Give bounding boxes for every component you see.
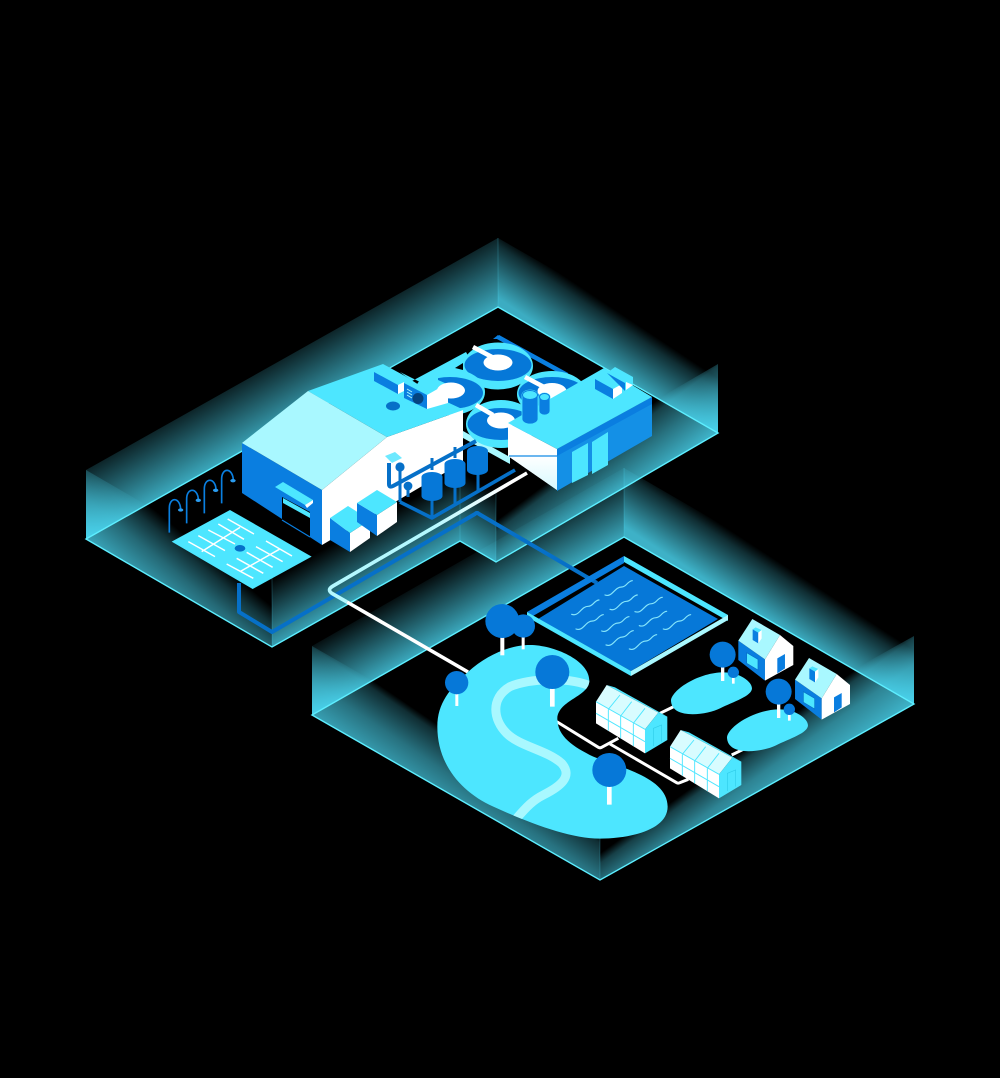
crate: right — [357, 490, 397, 536]
control building — [508, 367, 652, 491]
trees around pond — [445, 604, 626, 805]
doors — [572, 432, 608, 483]
main building — [242, 364, 463, 552]
house: lower — [795, 658, 850, 720]
greenhouse: upper — [596, 685, 667, 753]
clarifier platform — [400, 335, 567, 464]
valve box — [385, 452, 402, 463]
white pipe: plant to pond — [330, 473, 527, 672]
reservoir — [527, 556, 728, 676]
stream — [496, 680, 592, 818]
lower glass box walls — [312, 468, 914, 880]
greenhouse: lower — [670, 730, 741, 798]
crate: left — [330, 506, 370, 552]
fan unit — [404, 383, 448, 409]
clarifier tank: left — [415, 369, 485, 415]
house: upper — [738, 619, 793, 681]
building door and awning — [275, 482, 313, 537]
reservoir waves — [572, 581, 691, 649]
lamp posts — [169, 470, 236, 533]
rooftop units — [595, 367, 633, 399]
park pond with stream — [437, 645, 668, 839]
garden: lower — [727, 679, 808, 751]
gap between clarifiers — [455, 363, 463, 370]
roof vent — [386, 402, 400, 410]
storage tanks — [422, 446, 488, 501]
upper glass box walls — [86, 238, 718, 647]
silo: large — [522, 390, 538, 424]
garden: upper — [671, 642, 752, 714]
roof equipment box — [374, 372, 404, 394]
clarifier tank: bottom — [466, 400, 536, 448]
silo: small — [539, 393, 550, 415]
swimming pool — [172, 510, 312, 589]
isometric water cycle illustration — [84, 238, 916, 881]
irrigation pipes — [557, 706, 743, 783]
clarifier tank: top — [463, 342, 533, 390]
clarifier tank: right — [517, 371, 587, 417]
tank farm and pipework — [385, 441, 515, 518]
blue pipe: pool to reservoir — [239, 513, 597, 632]
